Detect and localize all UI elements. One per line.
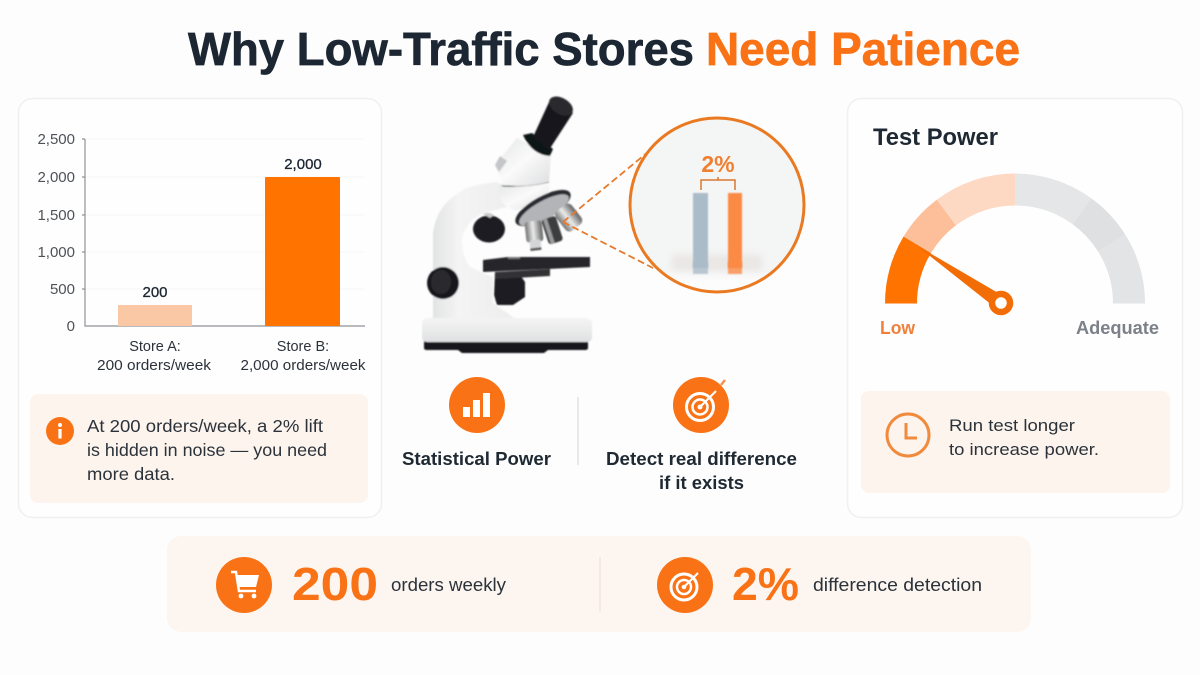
arm bbox=[433, 182, 517, 320]
panel: test power bbox=[848, 98, 1182, 518]
x axis labels: 2,000 orders/week bbox=[240, 358, 366, 374]
y axis labels: 1,000 bbox=[37, 244, 75, 261]
gauge bbox=[880, 190, 1159, 338]
feet bbox=[424, 341, 588, 353]
bar chart bbox=[37, 131, 366, 374]
objectives bbox=[524, 202, 584, 251]
title bbox=[188, 23, 1020, 75]
small knob bbox=[473, 213, 505, 242]
y axis labels: 2,000 bbox=[37, 169, 75, 186]
bar: Store A: 200 bbox=[142, 284, 168, 301]
stage bbox=[483, 257, 590, 279]
panel: summary stats bbox=[167, 536, 1031, 632]
icon: info bbox=[46, 417, 74, 445]
bar: Store B: 2,000 bbox=[284, 156, 322, 173]
callout: noise note: is hidden in noise — you need bbox=[87, 440, 327, 460]
needle bbox=[916, 245, 1010, 312]
callout: run longer bbox=[861, 391, 1170, 493]
detect difference item: Detect real difference bbox=[606, 449, 797, 469]
bar: Store A bbox=[118, 284, 192, 326]
y axis labels: 1,500 bbox=[37, 207, 75, 224]
statistical power item: Statistical Power bbox=[402, 449, 551, 469]
title: Need Patience bbox=[706, 23, 1020, 75]
x axis labels: Store A: bbox=[129, 339, 181, 355]
icon: clock bbox=[887, 414, 929, 456]
microscope illustration bbox=[422, 93, 592, 353]
y axis labels bbox=[37, 131, 75, 335]
callout: run longer: Run test longer bbox=[949, 416, 1075, 435]
stat: 200 orders weekly: orders weekly bbox=[391, 575, 506, 595]
callout: run longer: to increase power. bbox=[949, 440, 1099, 459]
x axis labels: 200 orders/week bbox=[97, 358, 212, 374]
x axis labels: Store B: bbox=[277, 339, 329, 355]
leader lines bbox=[563, 152, 653, 268]
icon: target bbox=[673, 377, 729, 433]
title: Why Low-Traffic Stores bbox=[188, 23, 694, 75]
callout: noise note: At 200 orders/week, a 2% lift bbox=[87, 416, 323, 436]
gauge: Adequate bbox=[1076, 318, 1159, 338]
stat: 200 orders weekly: 200 bbox=[292, 558, 378, 610]
callout: noise note bbox=[30, 394, 368, 503]
2% label bbox=[701, 151, 735, 190]
stat: 2% difference detection: difference detection bbox=[813, 575, 982, 595]
y axis labels: 2,500 bbox=[37, 131, 75, 148]
panel: store order comparison bbox=[18, 98, 382, 518]
statistical power item bbox=[402, 377, 551, 469]
magnified inset with dashed leader lines bbox=[563, 118, 810, 298]
icon: target bbox=[657, 557, 713, 613]
stat: 200 orders weekly bbox=[216, 557, 506, 613]
callout: noise note: more data. bbox=[87, 464, 175, 484]
y axis labels: 500 bbox=[50, 281, 75, 298]
bar: Store B bbox=[265, 156, 340, 326]
heading: Test Power bbox=[873, 124, 998, 151]
2% label: 2% bbox=[701, 151, 735, 177]
y axis labels: 0 bbox=[67, 318, 75, 335]
detect difference item bbox=[606, 377, 797, 493]
head body bbox=[499, 182, 550, 210]
stage support bbox=[494, 272, 525, 305]
angled tube bbox=[495, 138, 551, 186]
eyepiece bbox=[523, 93, 576, 156]
icon: cart bbox=[216, 557, 272, 613]
base bbox=[422, 318, 592, 342]
focus knob bbox=[427, 267, 459, 299]
detect difference item: if it exists bbox=[659, 473, 744, 493]
icon: bars bbox=[449, 377, 505, 433]
x axis labels bbox=[97, 339, 366, 374]
nosepiece bbox=[510, 183, 576, 233]
stat: 2% difference detection: 2% bbox=[732, 558, 799, 610]
stat: 2% difference detection bbox=[657, 557, 982, 613]
gauge labels: Low bbox=[880, 318, 916, 338]
